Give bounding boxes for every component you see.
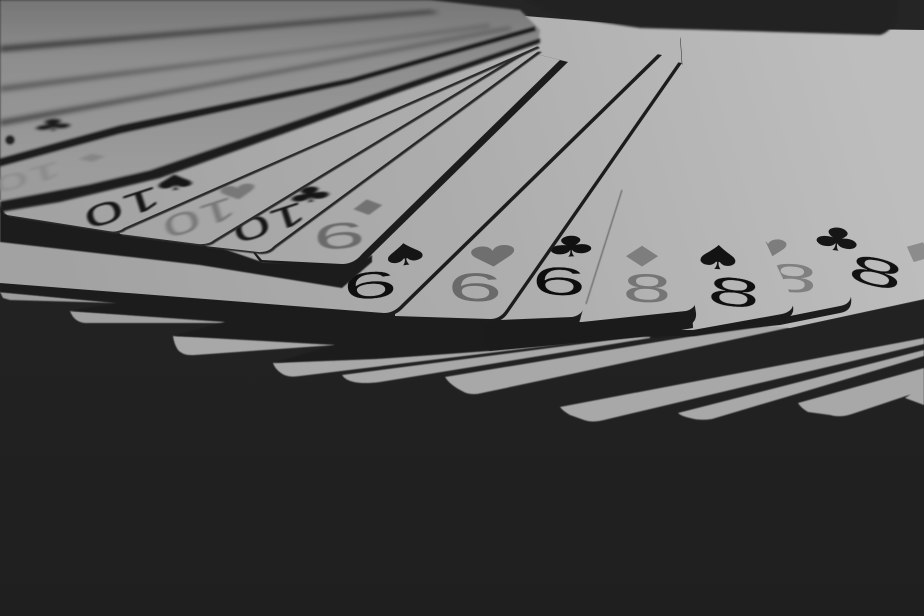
- strip: left short card: [173, 336, 340, 355]
- card: 10 of spades: [0, 40, 540, 236]
- card: 10 of hearts: [110, 40, 532, 246]
- card: 10 of hearts: ♥: [215, 178, 261, 207]
- band: dark gap two: [0, 38, 540, 212]
- strip: far left card: [70, 311, 225, 323]
- strip: left edge sliver: [0, 292, 118, 303]
- card: 6 of hearts: [395, 50, 682, 322]
- card: 10 of spades: ♠: [148, 168, 202, 198]
- card: 6 of diamonds with thick shadow: ♦: [343, 192, 393, 224]
- card: 8 of diamonds: ♦: [616, 240, 668, 273]
- band: dark gap one: [0, 26, 536, 167]
- lower card strips: [0, 292, 924, 422]
- card: 8 of hearts: ♥: [745, 234, 791, 266]
- card: 6 of spades: ♠: [376, 234, 434, 276]
- card: 10 of clubs: 10: [228, 194, 311, 250]
- card: 6 of diamonds with thick shadow: [240, 50, 568, 268]
- card field, top right: [525, 16, 924, 328]
- strip: right card: [798, 368, 924, 416]
- card: 6 of hearts: 6: [446, 264, 504, 311]
- shadow at top edge: [526, 0, 897, 35]
- card: 8 of hearts: [680, 30, 851, 333]
- right card group: [395, 30, 924, 351]
- card: 8 of clubs: 8: [844, 245, 908, 301]
- card: 6 of spades: 6: [341, 263, 399, 309]
- card: 8 of spades: [600, 30, 793, 336]
- far card field: [0, 0, 540, 205]
- blurred upper left cards: [0, 0, 540, 212]
- strip: long centre card: [445, 292, 924, 394]
- card: 10 of spades: 10: [79, 179, 166, 236]
- card: 8 of spades: ♠: [690, 238, 746, 279]
- band: mid line: [0, 27, 512, 126]
- strip: far right corner: [905, 386, 924, 405]
- card: 6 of clubs: 6: [530, 258, 588, 305]
- shadow patch below 8 of diamonds: [480, 305, 693, 351]
- card: 6 of diamonds with thick shadow: 6: [311, 215, 367, 259]
- card: 8 of diamonds: [540, 60, 696, 337]
- card: 6 of clubs: ♣: [543, 229, 599, 265]
- card: 6 of spades: [0, 30, 662, 316]
- card: 10 of clubs: [190, 45, 542, 254]
- card: 10 of clubs: ♣: [284, 179, 336, 210]
- shadow under left cards: [0, 205, 372, 288]
- card: 10 of hearts: 10: [158, 189, 241, 245]
- card: 8 of clubs: ♣: [808, 219, 866, 262]
- icon: blurred diamond: ♦: [70, 149, 114, 167]
- strip: thin centre card: [342, 335, 650, 383]
- icon: blurred spot: [5, 135, 15, 145]
- strip: thin right card: [678, 350, 924, 420]
- card: 8 of clubs: [808, 219, 924, 301]
- card: 8 of spades: 8: [705, 267, 763, 318]
- strip: short centre card: [273, 332, 620, 377]
- strip: wide right card: [560, 338, 924, 422]
- card: 8 of diamonds: 8: [622, 265, 672, 312]
- card: 6 of clubs: [485, 50, 660, 334]
- left card group: [0, 40, 568, 268]
- card: 8 of hearts: 8: [765, 255, 819, 303]
- shadow under front row: [0, 270, 924, 363]
- band: far dark line top: [0, 10, 440, 52]
- card: 6 of hearts: ♥: [465, 239, 521, 276]
- icon: blurred club: ♣: [30, 113, 76, 137]
- band: far mid line: [0, 24, 490, 92]
